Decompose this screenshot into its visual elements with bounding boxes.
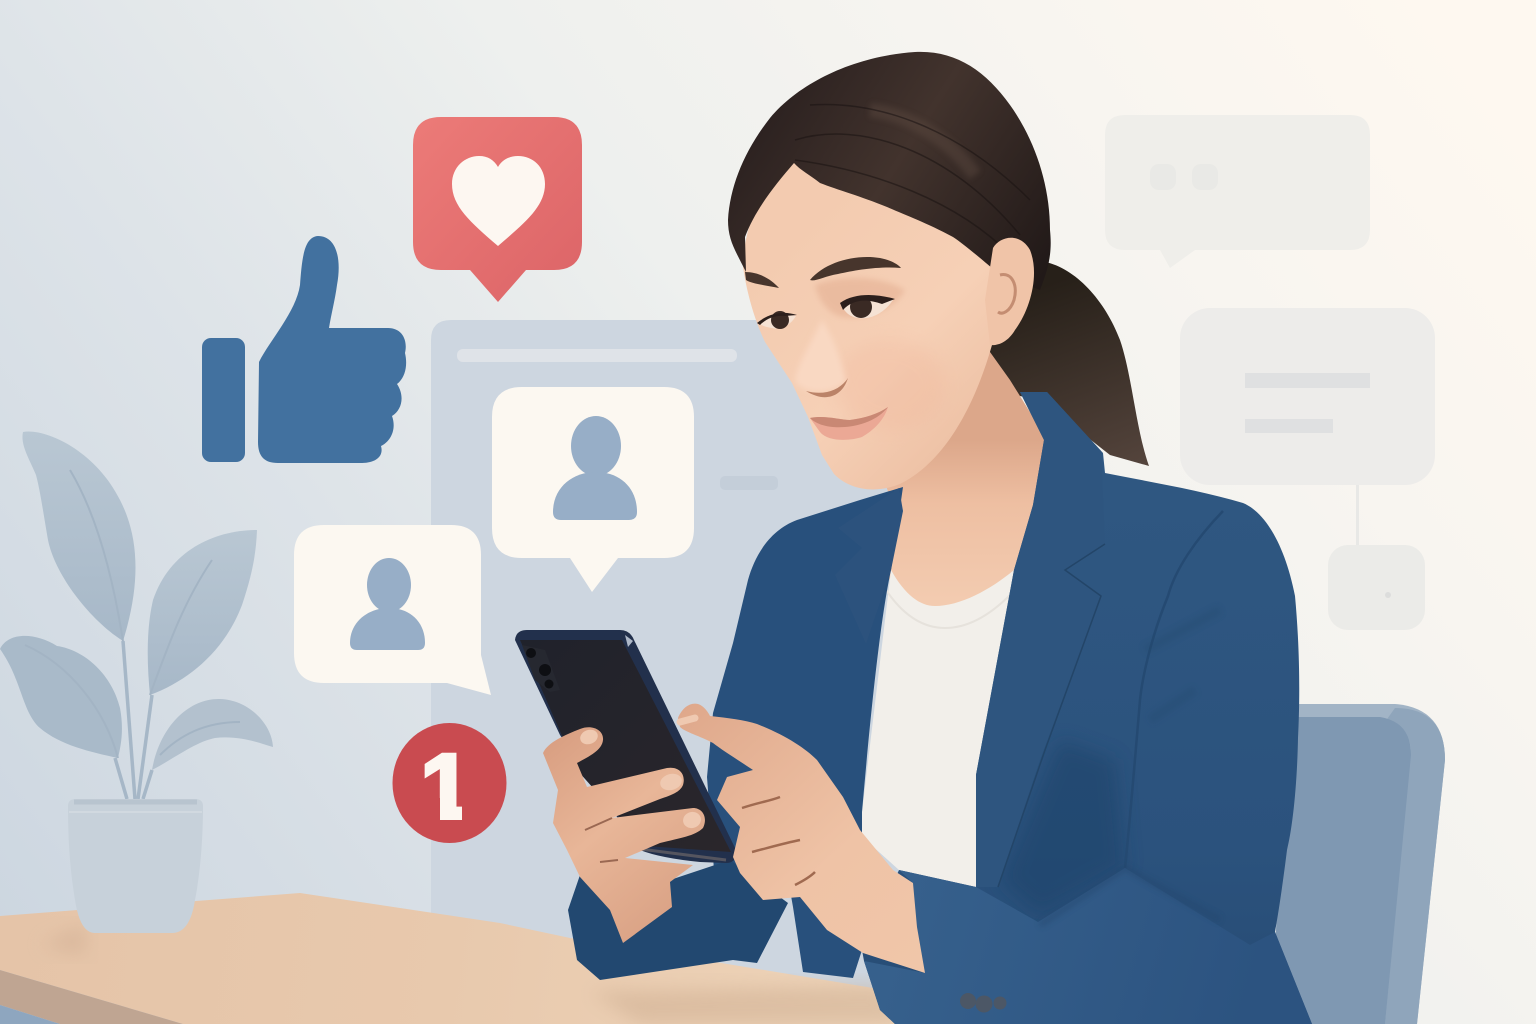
face <box>743 150 1000 489</box>
shirt collar band <box>886 590 1010 628</box>
sleeve buttons <box>960 993 1006 1012</box>
ear <box>985 238 1034 345</box>
left eye <box>757 311 797 329</box>
desk <box>0 893 1060 1024</box>
right lapel <box>976 392 1105 887</box>
profile bubble large <box>492 387 694 592</box>
eye socket shading <box>815 278 905 318</box>
right eye <box>840 295 895 318</box>
faded chat bubble top right <box>1105 115 1370 268</box>
woman <box>515 52 1312 1024</box>
left sleeve <box>568 860 788 980</box>
left hand holding phone <box>543 727 705 943</box>
right hand tapping phone <box>678 704 925 973</box>
hair <box>728 52 1051 290</box>
blazer lower torso shading <box>1000 740 1125 915</box>
icon: heart notification bubble <box>413 117 582 302</box>
plant <box>0 432 273 933</box>
notification badge <box>392 723 506 843</box>
lips <box>810 407 888 440</box>
panel: faded app screen behind icons <box>431 320 900 1024</box>
nose highlight <box>795 320 846 391</box>
profile bubble small <box>294 525 491 695</box>
phone camera module <box>522 645 560 692</box>
white shirt <box>860 570 1014 890</box>
nose shadow <box>806 378 848 397</box>
phone <box>515 630 737 863</box>
neck <box>880 345 1046 612</box>
plant leaves <box>0 432 273 799</box>
blazer body <box>862 392 1312 1024</box>
eyebrows <box>745 257 901 288</box>
ponytail <box>985 262 1149 466</box>
notification badge: 1 <box>420 736 472 838</box>
blazer left side and arm <box>707 487 903 978</box>
left lapel <box>835 488 903 644</box>
hair highlight <box>870 110 975 175</box>
sleeve fold shadows <box>1145 610 1220 720</box>
icon: thumbs up <box>202 236 406 463</box>
right sleeve seam <box>1125 511 1223 868</box>
chair <box>1270 704 1445 1024</box>
plant pot <box>68 799 203 933</box>
right forearm and cuff <box>864 868 1312 1024</box>
hair strands <box>795 104 1030 260</box>
faded message card right <box>1180 308 1435 630</box>
cheek blush <box>835 340 945 430</box>
